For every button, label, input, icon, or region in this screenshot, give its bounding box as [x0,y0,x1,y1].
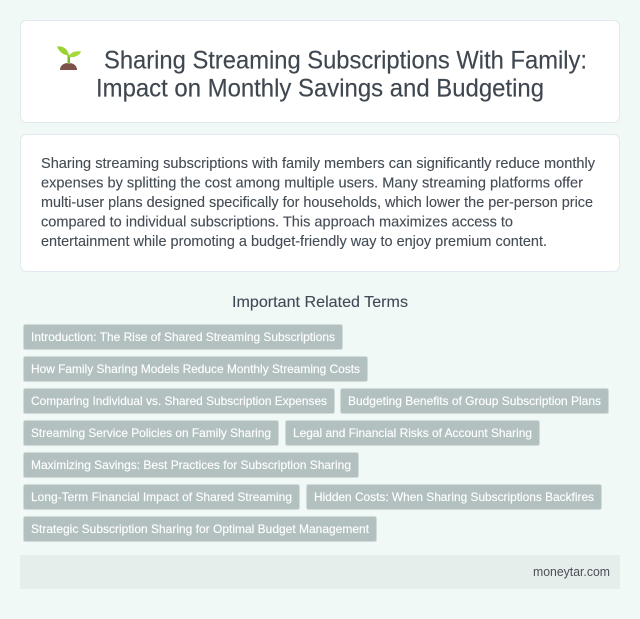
paragraph text: Sharing streaming subscriptions with family members can significantly reduce monthly [41,156,596,172]
tag: Introduction: The Rise of Shared Streaming Subscriptions [31,330,335,344]
section heading: Important Related Terms [232,294,408,311]
tag [286,420,540,446]
tag: Long-Term Financial Impact of Shared Streaming [31,490,292,504]
tag: Streaming Service Policies on Family Sharing [31,426,271,440]
footer bar [20,555,620,589]
tag: Hidden Costs: When Sharing Subscriptions Backfires [314,490,594,504]
title text: Impact on Monthly Savings and Budgeting [96,74,544,102]
tag [24,452,358,478]
tag [24,388,334,414]
tag [24,420,278,446]
tag: Comparing Individual vs. Shared Subscription Expenses [31,394,327,408]
icon: seedling [57,46,81,70]
title text: Sharing Streaming Subscriptions With Family: [104,46,587,74]
tag: How Family Sharing Models Reduce Monthly Streaming Costs [31,362,360,376]
tag [24,484,300,510]
paragraph text: entertainment while promoting a budget-friendly way to enjoy premium content. [41,234,547,250]
tag: Maximizing Savings: Best Practices for Subscription Sharing [31,458,351,472]
tag [340,388,608,414]
footer source text: moneytar.com [533,565,610,579]
title text [96,46,587,102]
tag: Legal and Financial Risks of Account Sharing [293,426,532,440]
tag: Strategic Subscription Sharing for Optimal Budget Management [31,522,370,536]
paragraph text: multi-user plans designed specifically for households, which lower the per-person price [41,195,593,211]
paragraph text [41,156,596,250]
tag list [24,324,608,542]
paragraph text: compared to individual subscriptions. This approach maximizes access to [41,214,513,230]
paragraph text: expenses by splitting the cost among multiple users. Many streaming platforms offer [41,176,583,192]
panel: intro paragraph [20,134,620,272]
tag: Budgeting Benefits of Group Subscription Plans [348,394,601,408]
panel: title card [20,20,620,122]
tag [306,484,602,510]
tag [24,516,376,542]
tag [24,356,368,382]
tag [24,324,342,350]
